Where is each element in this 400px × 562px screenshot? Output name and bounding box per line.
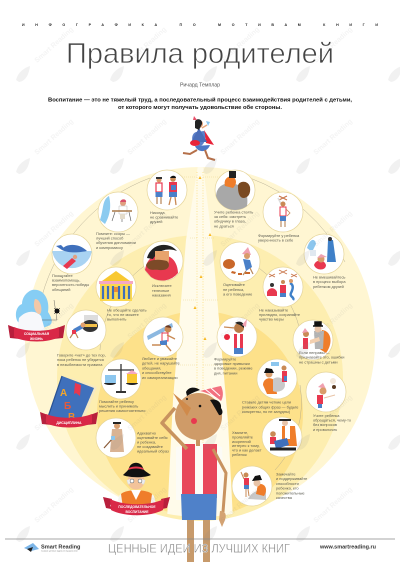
caption: в незыблемости правила: [57, 362, 103, 367]
caption: и ребенка,: [137, 440, 156, 444]
caption: здоровые привычки: [214, 361, 250, 366]
caption: Не обещайте сделать: [107, 308, 146, 312]
icon: running boy: [143, 317, 183, 357]
illustration: fairy: [16, 290, 60, 334]
ribbon: consistent upbringing: ПОСЛЕДОВАТЕЛЬНОЕ: [118, 505, 156, 509]
caption: идеальный образ: [137, 448, 169, 454]
caption: детей, не нарушайте: [142, 361, 180, 366]
caption: Помните: ссоры —: [96, 231, 130, 236]
footer: ЦЕННЫЕ ИДЕИ ИЗ ЛУЧШИХ КНИГ: [108, 544, 291, 556]
caption: проявляйте: [232, 434, 253, 439]
caption: друзей: [150, 219, 162, 224]
caption: чувство меры: [259, 316, 284, 322]
watermarks: Smart Reading: [220, 210, 261, 248]
caption: Замечайте: [276, 472, 296, 476]
icon: puppet with apple: [217, 317, 257, 357]
icon: sewing: [98, 192, 138, 232]
caption: дня, питании: [214, 370, 237, 375]
caption: признавайте это, ошибки: [299, 355, 344, 360]
caption: телесные: [152, 288, 169, 293]
icon: confident puppet: [263, 192, 303, 232]
icon: child and oven: [66, 310, 106, 350]
caption: не страшны с детьми: [299, 359, 338, 364]
caption: Говорите «нет» до тех пор,: [57, 352, 106, 358]
footer: www.smartreading.ru: [319, 544, 376, 550]
caption: мыслить и принимать: [99, 404, 138, 409]
caption: Хвалите,: [232, 430, 248, 435]
caption: Формируйте у ребенка: [258, 233, 300, 238]
ribbon: social life: ЖИЗНЬ: [29, 337, 43, 341]
caption: не создавайте: [137, 444, 163, 449]
illustration: book: В: [68, 412, 75, 423]
caption: Формируйте: [214, 356, 236, 362]
icon: pirate: [143, 241, 183, 281]
caption: обращаться, чему-то: [313, 418, 351, 423]
caption: Любите и уважайте: [142, 356, 177, 361]
caption: (никаких общих фраз — будьте: [242, 404, 298, 409]
icon: building: [96, 267, 136, 307]
caption: ребенок: [232, 452, 247, 457]
caption: ребенка, его: [276, 486, 299, 491]
caption: Никогда: [150, 210, 165, 215]
icon: father and dancing child: [232, 466, 272, 506]
caption: что и как делает: [232, 448, 262, 453]
watermarks: Smart Reading: [34, 210, 75, 248]
watermarks: Smart Reading: [34, 486, 75, 524]
caption: и компромиссу: [96, 245, 123, 250]
watermarks: Smart Reading: [127, 118, 168, 156]
caption: положительные: [276, 490, 305, 495]
background: concentric yellow fan: [25, 165, 375, 521]
watermarks: Smart Reading: [127, 210, 168, 248]
caption: их самореализации: [142, 375, 178, 380]
icon: puppet with broken toy: [220, 242, 260, 282]
footer: Smart Reading: [41, 544, 81, 550]
caption: Адекватно: [137, 430, 156, 436]
ribbon: discipline: [40, 412, 98, 428]
watermarks: Smart Reading: [313, 486, 354, 524]
ribbon: social life: СОЦИАЛЬНАЯ: [24, 332, 50, 336]
caption: Ставьте детям четкие цели: [242, 400, 291, 404]
caption: Не вмешивайтесь: [313, 274, 345, 280]
caption: Учите ребенка: [313, 413, 340, 418]
watermarks: Smart Reading: [220, 302, 261, 340]
watermarks: Smart Reading: [34, 394, 75, 432]
caption: в процесс выбора: [313, 279, 346, 284]
caption: искренний: [232, 439, 251, 444]
caption: Оценивайте: [223, 282, 245, 287]
caption: обещания,: [142, 365, 161, 370]
icon: choosing friends: [304, 234, 344, 274]
caption: Не наказывайте: [259, 308, 288, 312]
caption: взаимопомощь,: [52, 278, 80, 283]
caption: а его поведение: [223, 292, 252, 297]
caption: и проволочек: [313, 427, 337, 432]
illustration: old man: [117, 463, 156, 508]
caption: и поддерживайте: [276, 476, 307, 481]
ribbon: consistent upbringing: [103, 497, 170, 515]
caption: обидчику в глаза,: [214, 219, 246, 224]
illustration: Pinocchio: [162, 386, 226, 562]
watermarks: Smart Reading: [34, 118, 75, 156]
icon: father and son: [293, 320, 333, 360]
caption: оценивайте себя: [137, 435, 168, 440]
caption: решения самостоятельно: [99, 408, 145, 413]
caption: вероятность победы: [52, 282, 89, 287]
caption: обещаний: [52, 287, 70, 292]
watermarks: Smart Reading: [313, 26, 354, 64]
watermarks: Smart Reading: [220, 118, 261, 156]
watermarks: Smart Reading: [220, 26, 261, 64]
caption: Если неправы —: [299, 350, 330, 355]
caption: Поощряйте: [52, 273, 73, 278]
watermarks: Smart Reading: [220, 486, 261, 524]
illustration: book: А: [60, 388, 67, 399]
watermarks: Smart Reading: [127, 394, 168, 432]
ribbon: social life: [8, 325, 65, 342]
caption: обучения дипломатии: [96, 240, 136, 245]
caption: выполнить: [107, 316, 126, 322]
title: Правила родителей: [66, 38, 334, 70]
caption: не ребенка,: [223, 287, 244, 292]
footer: Самые ценные идеи из лучших книг: [41, 550, 78, 552]
icon: father carrying child: [257, 359, 297, 399]
watermarks: Smart Reading: [127, 486, 168, 524]
caption: качества: [276, 495, 293, 500]
icon: questions: [306, 372, 346, 412]
caption: прилюдно, сохраняйте: [259, 312, 300, 317]
icon: whale and swimmer: [52, 234, 92, 274]
watermarks: Smart Reading: [127, 302, 168, 340]
caption: то, что не можете: [107, 312, 139, 317]
watermarks: Smart Reading: [313, 394, 354, 432]
caption: интерес к тому,: [232, 443, 260, 448]
watermarks: Smart Reading: [313, 302, 354, 340]
label: top line: ИНФОГРАФИКА ПО МОТИВАМ КНИГИ: [22, 23, 378, 27]
watermarks: Smart Reading: [34, 26, 75, 64]
intro text: [48, 96, 353, 111]
intro text: Воспитание — это не тяжелый труд, а последовательный процесс взаимодействия родителей с детьми,: [48, 96, 353, 104]
watermarks: Smart Reading: [313, 118, 354, 156]
watermarks: Smart Reading: [220, 394, 261, 432]
caption: ребенком друзей: [313, 284, 344, 289]
illustration: book: Б: [64, 401, 71, 412]
icon: two friends: [147, 170, 187, 210]
caption: за себя: смотреть: [214, 214, 246, 219]
author: Ричард Темплар: [180, 82, 220, 88]
caption: лучший способ: [96, 236, 124, 241]
watermarks: Smart Reading: [34, 302, 75, 340]
caption: не сравнивайте: [150, 215, 178, 220]
illustration: running mother: [183, 116, 215, 160]
footer: [5, 539, 395, 556]
caption: конкретны, но не занудны): [242, 409, 291, 414]
icon: father reading: [262, 417, 302, 457]
caption: без вопросов: [313, 422, 337, 427]
caption: уверенность в себе: [258, 238, 293, 243]
icon: three puppets: [263, 267, 303, 307]
caption: в поведении, режиме: [214, 366, 253, 371]
ribbon: discipline: ДИСЦИПЛИНА: [56, 421, 82, 425]
watermarks: Smart Reading: [313, 210, 354, 248]
caption: не драться: [214, 223, 234, 228]
illustration: book: [48, 375, 97, 424]
caption: и способствуйте: [142, 370, 172, 375]
ribbon: consistent upbringing: ВОСПИТАНИЕ: [125, 510, 149, 514]
icon: bear and wolf: [215, 170, 255, 210]
caption: наказания: [152, 293, 171, 298]
caption: способности: [276, 481, 299, 486]
icon: self-image adult: [96, 418, 136, 458]
caption: Учите ребенка стоять: [214, 210, 253, 214]
icon: scales: [101, 359, 141, 399]
watermarks: Smart Reading: [127, 26, 168, 64]
intro text: от которого могут получать удовольствие обе стороны.: [118, 104, 283, 111]
caption: Исключите: [152, 283, 172, 288]
caption: пока ребенок не убедится: [57, 357, 104, 362]
caption: Помогайте ребенку: [99, 399, 134, 404]
